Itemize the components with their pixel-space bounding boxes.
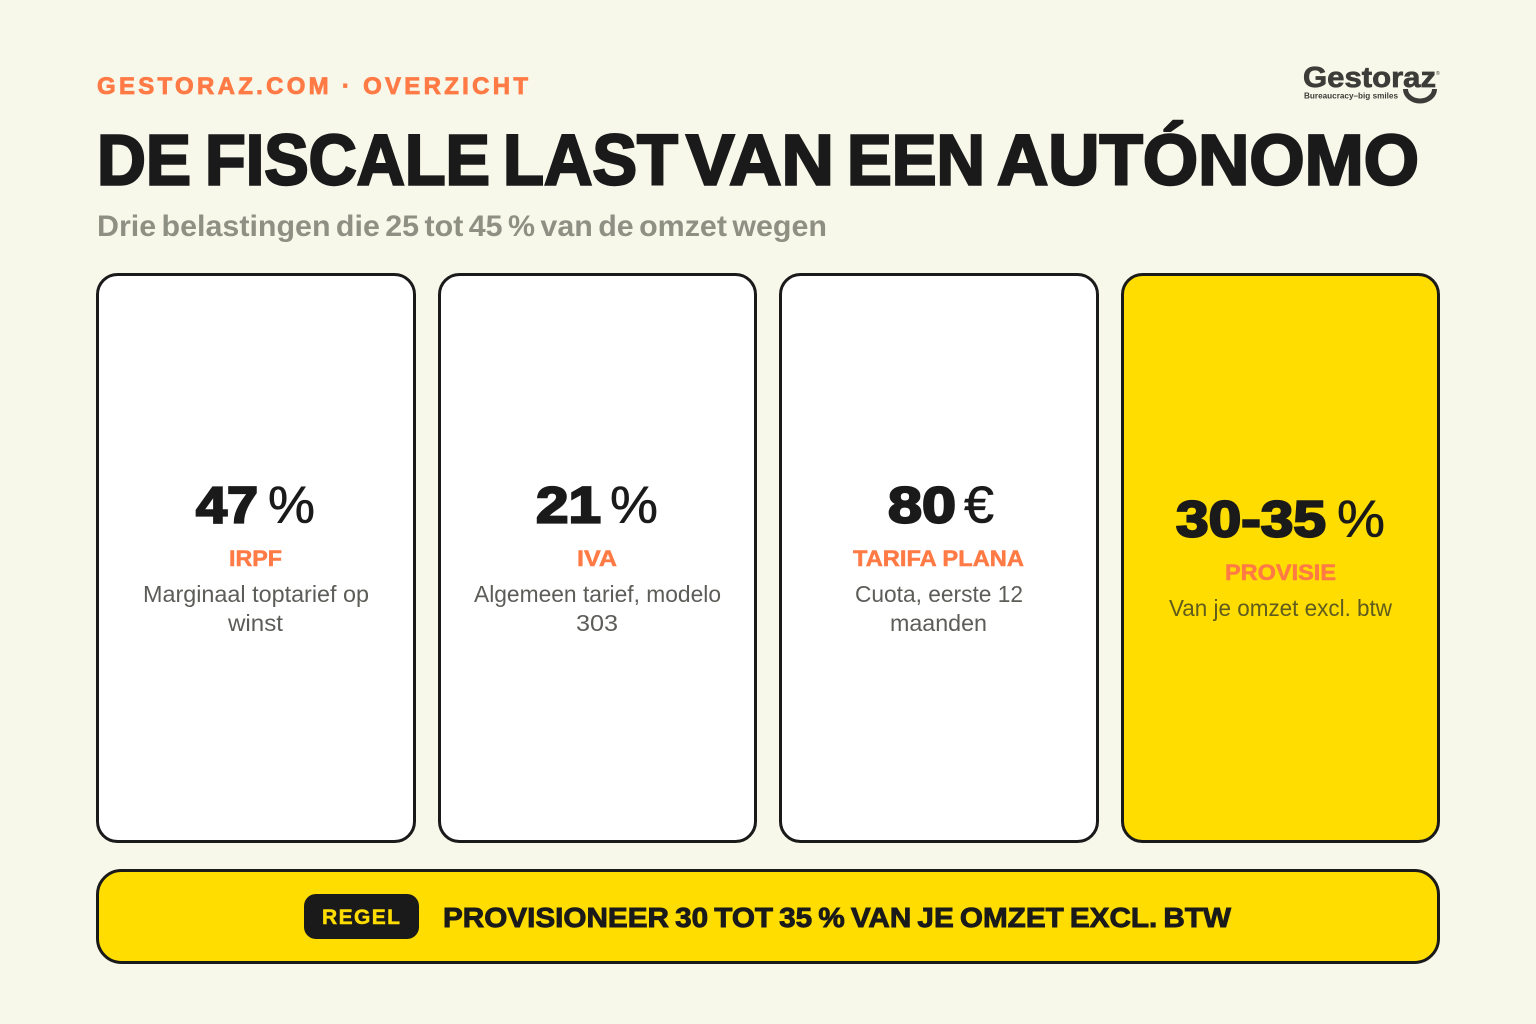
stat: 21 %: %: [610, 476, 658, 534]
title: EEN: [847, 122, 985, 200]
stat: 80 €: [888, 476, 994, 534]
label: Tarifa plana: TARIFA PLANA: [853, 546, 1024, 571]
panel: IVA: [440, 274, 756, 842]
title: LAST: [503, 122, 678, 200]
title: DE: [97, 122, 191, 200]
description: IRPF: winst: [227, 610, 284, 636]
title: AUTÓNOMO: [997, 122, 1419, 200]
description: IRPF: Marginaal toptarief op: [143, 581, 369, 607]
description: IRPF: [143, 581, 369, 636]
title: VAN: [686, 122, 834, 200]
stat: 30-35 %: 30-35: [1176, 490, 1326, 548]
description: Tarifa plana: [855, 581, 1023, 636]
label: IRPF: IRPF: [229, 546, 282, 571]
stat: 30-35 %: %: [1337, 490, 1385, 548]
logo: Gestoraz: ®: [1436, 70, 1440, 77]
badge: REGEL: REGEL: [322, 906, 400, 929]
description: Tarifa plana: Cuota, eerste 12: [855, 581, 1023, 607]
stat: 47 %: %: [268, 476, 315, 534]
description: IVA: [474, 581, 721, 636]
description: Tarifa plana: maanden: [890, 610, 987, 636]
stat: 80 €: €: [964, 476, 994, 534]
description: IVA: 303: [576, 610, 618, 636]
description: IVA: Algemeen tarief, modelo: [474, 581, 721, 607]
stat: 80 €: 80: [888, 476, 956, 534]
label: IVA: IVA: [577, 546, 617, 571]
stat: 21 %: 21: [536, 476, 601, 534]
rule text: PROVISIONEER 30 TOT 35 % VAN JE OMZET EXCL. BTW: [443, 902, 1232, 933]
description: Provisie: Van je omzet excl. btw: [1169, 595, 1392, 621]
panel: IRPF: [98, 274, 414, 842]
badge: REGEL: [304, 894, 419, 939]
stat: 30-35 %: [1176, 490, 1385, 548]
banner: rule: [98, 870, 1438, 962]
panel: Tarifa plana: [780, 274, 1098, 842]
logo: Gestoraz: Gestoraz: [1303, 62, 1436, 94]
title: [97, 122, 1419, 200]
panel: Provisie: [1122, 274, 1438, 842]
eyebrow: GESTORAZ.COM · OVERZICHT: [97, 73, 528, 100]
subtitle: Drie belastingen die 25 tot 45 % van de omzet wegen: [97, 210, 827, 243]
label: Provisie: PROVISIE: [1225, 560, 1336, 585]
stat: 47 %: 47: [196, 476, 258, 534]
stat: 21 %: [536, 476, 658, 534]
stat: 47 %: [196, 476, 315, 534]
logo: Gestoraz: Bureaucracy–big smiles: [1304, 92, 1399, 100]
title: FISCALE: [205, 122, 490, 200]
